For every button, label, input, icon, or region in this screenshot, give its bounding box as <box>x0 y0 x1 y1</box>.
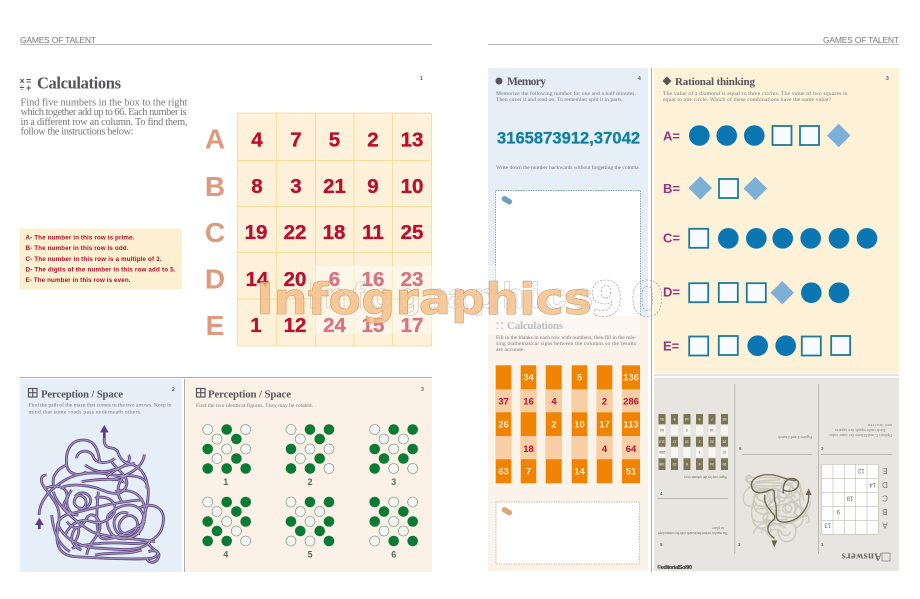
column 5: 2 <box>602 396 607 408</box>
answers maze solution <box>751 475 811 546</box>
panel: perception figures <box>186 379 432 572</box>
grid numbers: 6 <box>329 268 340 291</box>
column 6: 113 <box>623 420 639 430</box>
answers small text: Signs vary by the column rows <box>683 475 727 479</box>
maze <box>35 425 163 562</box>
answers small text: Each circle equals two squares <box>834 428 885 432</box>
header: left page: GAMES OF TALENT <box>20 35 96 45</box>
figure 6 <box>369 497 418 560</box>
column 6: 51 <box>626 466 637 478</box>
icon: answers check <box>882 553 890 561</box>
answers table <box>658 414 728 470</box>
row letters: C <box>205 217 225 248</box>
heading: Calculations <box>507 320 564 332</box>
grid numbers: 9 <box>367 175 379 198</box>
answer box <box>496 190 640 316</box>
heading: Rational thinking <box>675 76 756 88</box>
figure 4: 4 <box>223 550 228 560</box>
column 1: 63 <box>498 466 509 478</box>
figure 4 <box>202 497 251 560</box>
figure 1 <box>202 424 251 487</box>
panel: rational thinking <box>654 68 899 373</box>
icon: memory dot <box>496 78 502 84</box>
grid numbers: 2 <box>367 128 379 152</box>
row A: A= <box>663 128 680 144</box>
answers table: 5 <box>686 462 688 466</box>
watermark: 90 <box>590 272 664 328</box>
column 2: 34 <box>523 372 534 384</box>
icon: math signs: × <box>496 321 499 327</box>
row C: C= <box>663 230 680 246</box>
answers table: 3 <box>686 428 688 432</box>
heading: Perception / Space <box>208 388 291 400</box>
row C <box>663 228 877 249</box>
icon: diamond <box>662 76 672 86</box>
callout: instructions: D- The digits of the number in this row add to 5. <box>26 266 176 274</box>
answers table: 18 <box>710 428 714 432</box>
icon: pencil <box>501 195 513 205</box>
watermark: Infographics <box>256 274 592 325</box>
heading: Perception / Space <box>41 388 123 400</box>
heading: Calculations <box>37 74 122 92</box>
icon: math signs: = <box>26 76 31 86</box>
answers small text: in place <box>712 526 724 530</box>
grid numbers: 15 <box>362 314 384 337</box>
figure 1: 1 <box>223 477 228 487</box>
text block: equal to one circle. Which of these combinations have the same value? <box>663 96 832 103</box>
grid numbers: 17 <box>401 314 423 337</box>
grid numbers: 22 <box>284 221 306 244</box>
answers table: 17 <box>673 440 676 444</box>
row E <box>663 335 850 356</box>
panel: answers (upside down) <box>654 378 899 571</box>
icon: math signs: + <box>26 83 31 93</box>
page number: 3 <box>421 387 424 393</box>
grid numbers: 13 <box>401 128 423 152</box>
heading: answers: Answers <box>842 550 882 561</box>
answers table: 22 <box>673 462 676 466</box>
column 3: 4 <box>551 396 557 408</box>
answers grid <box>822 464 888 534</box>
column 2: 18 <box>523 444 534 455</box>
grid numbers: 25 <box>401 221 423 244</box>
grid numbers: 5 <box>329 128 340 152</box>
text block: Then cover it and read on. To remember split it in parts. <box>496 97 624 103</box>
answers small text: and thirteen <box>868 423 892 427</box>
figure 2: 2 <box>307 477 313 487</box>
answers grid: 12 <box>857 467 865 473</box>
column 1 <box>496 365 511 483</box>
answers table: 29 <box>723 462 726 466</box>
answers grid: A <box>882 521 888 530</box>
text block: Find the path of the maze that comes to the two arrows. Keep in <box>28 402 172 408</box>
figure 3: 3 <box>391 477 396 487</box>
column 4: 14 <box>574 466 585 478</box>
answers table: 26 <box>723 440 726 444</box>
column 5: 17 <box>599 420 610 430</box>
answers item numbers: 6 <box>739 446 742 451</box>
answers table: 14 <box>685 417 689 421</box>
text block: are accurate. <box>496 347 526 353</box>
text block <box>496 334 636 353</box>
answers grid: D <box>882 480 888 489</box>
text block: Fill in the blanks in each row with numbers, then fill in the mis- <box>496 334 636 341</box>
icon: math signs: ÷ <box>20 83 24 93</box>
panel: calculations intro <box>20 74 423 138</box>
row letters: D <box>205 264 225 294</box>
icon: math signs: × <box>20 76 25 86</box>
grid numbers: 3 <box>290 175 302 198</box>
answers item numbers: 4 <box>660 491 663 496</box>
grid numbers: 4 <box>251 128 263 152</box>
row letters <box>205 124 225 341</box>
text block <box>496 90 637 103</box>
panel: calculations columns <box>488 315 648 571</box>
column 1: 26 <box>498 420 509 430</box>
grid numbers: 8 <box>251 175 263 198</box>
grid numbers: 10 <box>401 175 423 198</box>
column 2: 16 <box>523 396 534 408</box>
text block: Memorize the following number for one and a half minutes. <box>496 90 637 97</box>
answers small text: The number written backwards with the comma kept <box>658 531 728 535</box>
answers table: 34 <box>710 462 714 466</box>
page number: 4 <box>638 76 641 82</box>
answers table: 10 <box>685 440 689 444</box>
grid numbers: 23 <box>401 268 423 291</box>
answers item numbers: 1 <box>821 542 824 547</box>
answers table: 32 <box>710 440 714 444</box>
answers table: 113 <box>659 440 665 444</box>
figure 3 <box>369 424 418 487</box>
figure 6: 6 <box>391 550 396 560</box>
column 6: 64 <box>626 444 637 455</box>
answers table: 7 <box>711 417 713 421</box>
icon: math signs: + <box>500 326 504 332</box>
column 6: 136 <box>623 372 639 384</box>
text block: mind that some roads pass underneath others. <box>28 410 142 416</box>
answers grid: 14 <box>869 481 876 487</box>
text block: follow the instructions below: <box>20 126 134 138</box>
figure 2 <box>286 424 334 487</box>
answers table: 9 <box>698 417 700 421</box>
chart: number grid <box>205 113 432 346</box>
text block <box>28 402 172 416</box>
callout: instructions: B- The number in this row is odd. <box>26 245 129 252</box>
row E: E= <box>663 338 680 354</box>
icon: perception <box>28 388 37 397</box>
answers grid: 18 <box>846 494 853 500</box>
heading: Memory <box>507 76 546 88</box>
icon: pencil <box>501 506 513 516</box>
answers grid: 9 <box>836 508 840 514</box>
answers grid: E <box>882 466 888 475</box>
answers table: 51 <box>660 417 664 421</box>
icon: math signs: ÷ <box>496 326 499 332</box>
grid numbers <box>245 128 423 337</box>
credit: ©editorialSol90 <box>657 564 692 571</box>
grid numbers: 18 <box>323 221 345 244</box>
row D: D= <box>663 284 680 300</box>
text block: The value of a diamond is equal to three circles. The value of two squares is <box>663 90 847 97</box>
grid numbers: 19 <box>245 221 267 244</box>
callout: instructions <box>20 229 181 289</box>
answers table: 286 <box>659 450 665 454</box>
column 2 <box>521 365 536 483</box>
answers table: 6 <box>698 462 700 466</box>
answers table: 2 <box>698 440 700 444</box>
answers table: 136 <box>659 462 665 466</box>
grid numbers: 21 <box>323 175 346 198</box>
text block <box>663 90 847 103</box>
text block: Write down the number backwards without forgetting the comma. <box>496 164 641 171</box>
row A <box>663 124 850 147</box>
watermark: Infographics <box>308 275 593 316</box>
column 6 <box>622 365 640 483</box>
column 3: 2 <box>551 420 557 430</box>
page number: 2 <box>172 387 175 393</box>
column 5 <box>597 365 612 483</box>
grid numbers: 20 <box>284 268 306 291</box>
answers small text <box>658 423 892 535</box>
answers table: 63 <box>723 417 726 421</box>
icon: math signs <box>20 76 31 93</box>
row letters: B <box>205 171 225 202</box>
page number: 1 <box>420 76 423 82</box>
callout: instructions: A- The number in this row is prime. <box>26 234 135 242</box>
column 4: 10 <box>574 420 585 430</box>
icon: math signs: = <box>500 321 504 327</box>
answers maze <box>743 476 811 542</box>
answers table: 8 <box>673 417 675 421</box>
text block: sing mathematical signs between the columns so the results <box>496 341 636 347</box>
row letters: A <box>205 124 225 154</box>
column 4 <box>572 365 587 483</box>
callout: instructions: E- The number in this row is even. <box>26 277 131 284</box>
column 3 <box>546 365 562 483</box>
answers table: 64 <box>660 428 664 432</box>
answers grid: C <box>882 494 888 502</box>
grid numbers: 1 <box>250 314 262 337</box>
number to memorize: 3165873912,37042 <box>497 130 640 148</box>
text block: Find the two identical figures. They may be rotated. <box>196 402 314 409</box>
answers grid: B <box>882 507 888 516</box>
column 6: 286 <box>623 396 639 408</box>
grid numbers: 11 <box>362 221 384 244</box>
text block: which together add up to 66. Each number is <box>20 107 186 118</box>
answers small text: Figures 2 and 4 match <box>778 435 812 439</box>
answers item numbers: 5 <box>660 542 663 547</box>
icon: perception <box>196 388 205 397</box>
answers item numbers <box>660 446 824 547</box>
icon: math signs <box>496 321 504 332</box>
panel: memory <box>488 68 648 316</box>
column 1: 37 <box>498 396 509 408</box>
page number: 3 <box>886 76 889 82</box>
column 2: 7 <box>526 466 531 478</box>
grid numbers: 16 <box>362 268 384 291</box>
text block: in a different row an column. To find them, <box>20 117 188 128</box>
answers item numbers: 3 <box>738 542 741 547</box>
column 4: 5 <box>577 372 583 384</box>
text block: Find five numbers in the box to the right <box>20 98 188 108</box>
figure 5: 5 <box>307 550 313 560</box>
answer box <box>496 502 640 564</box>
grid numbers: 24 <box>323 314 346 337</box>
watermark <box>256 266 664 334</box>
row B <box>663 176 767 200</box>
text block <box>20 98 188 138</box>
row letters: E <box>206 310 224 341</box>
figure 5 <box>286 497 334 560</box>
answers grid: 13 <box>824 522 831 528</box>
header: right page: GAMES OF TALENT <box>823 35 899 45</box>
callout: instructions: C- The number in this row is a multiple of 3. <box>26 256 162 263</box>
row B: B= <box>663 181 680 196</box>
answers table: 4 <box>698 450 700 454</box>
arrow: maze entry <box>35 518 44 529</box>
grid numbers: 7 <box>290 128 302 152</box>
answers table: 37 <box>723 450 726 454</box>
grid numbers: 12 <box>284 314 306 337</box>
answers item numbers: 2 <box>821 446 824 451</box>
column 5: 4 <box>602 444 608 455</box>
grid numbers: 14 <box>246 268 269 291</box>
row D <box>663 281 849 304</box>
answers small text: Options C and D have the same value. <box>828 433 892 437</box>
arrow: maze exit <box>100 425 109 438</box>
panel: perception maze <box>20 379 182 572</box>
